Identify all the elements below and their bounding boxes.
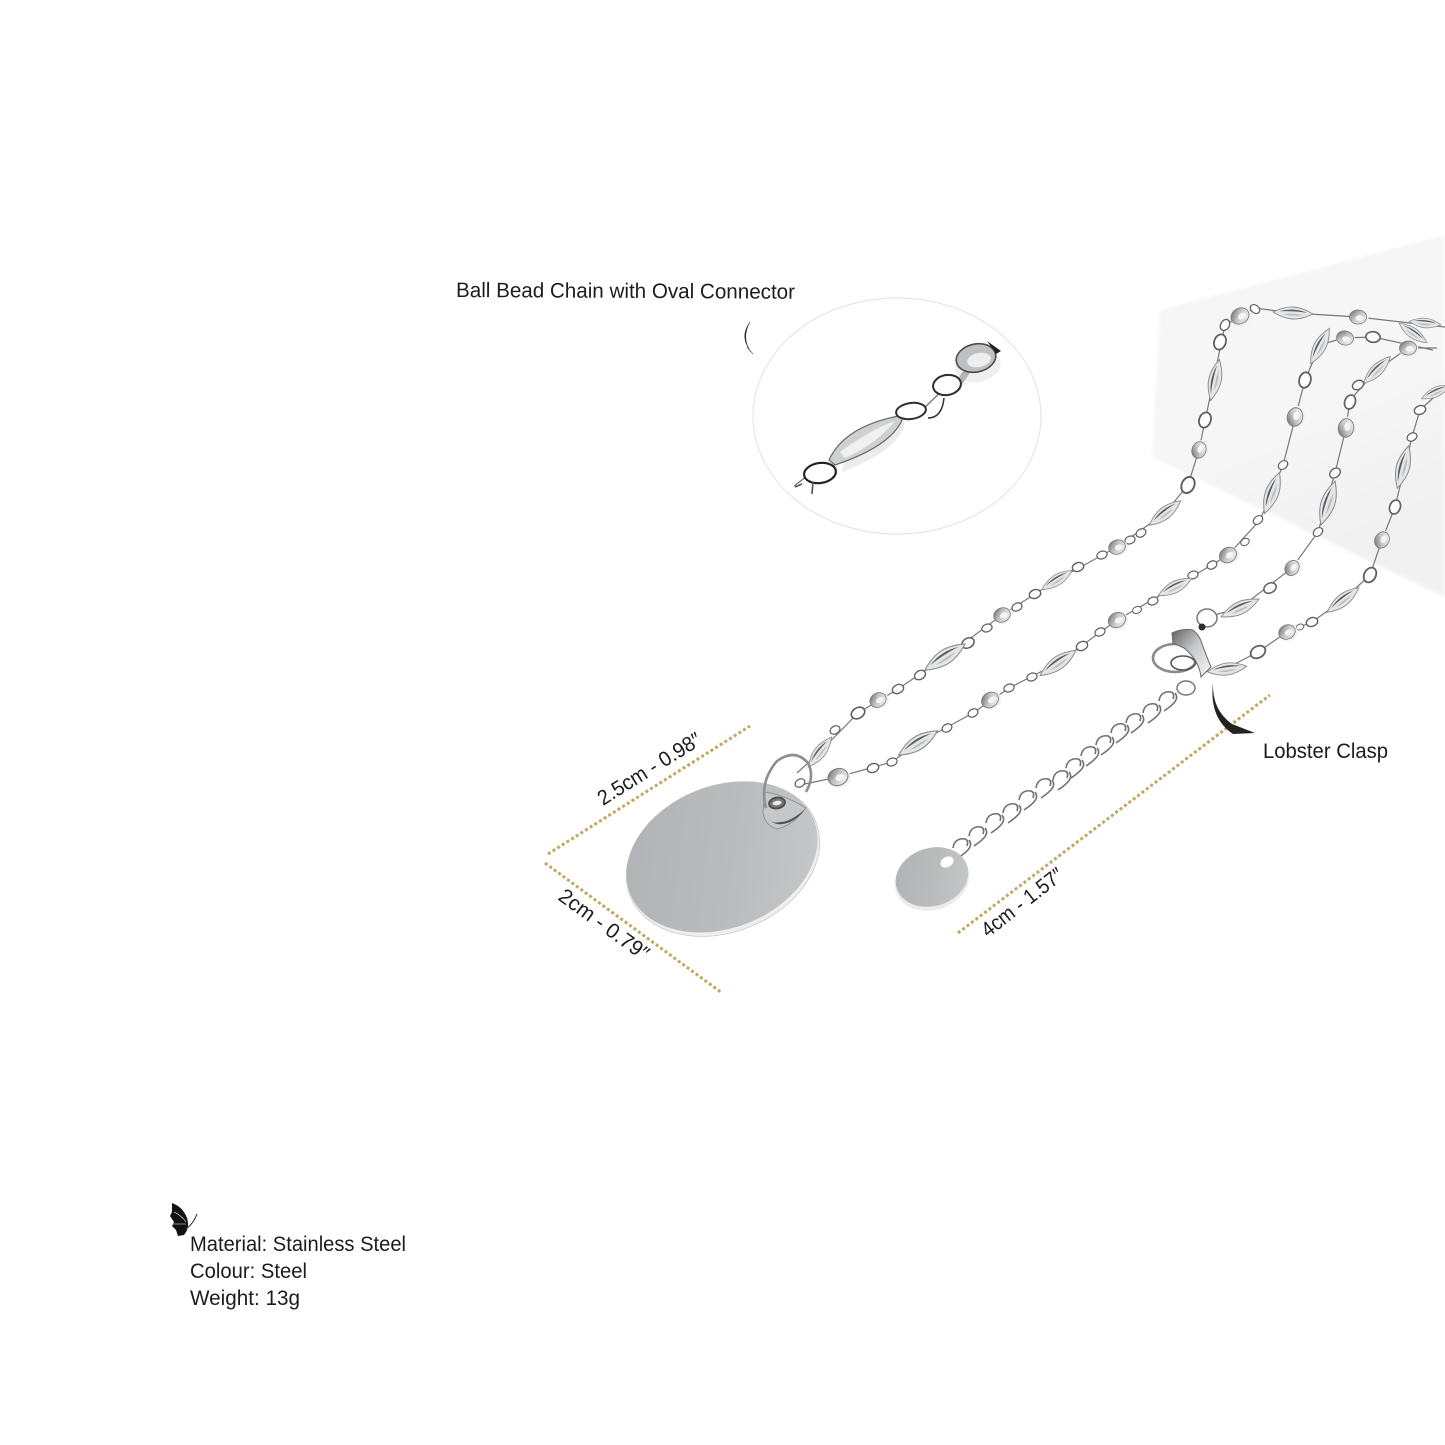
display block (1152, 235, 1445, 597)
text block: product specifications: Weight: 13g (190, 1287, 300, 1310)
dimension line: extender length (958, 695, 1270, 933)
text block: product specifications (190, 1233, 406, 1310)
text block: product specifications: Material: Stainless Steel (190, 1233, 406, 1256)
dimension label: 4cm: 4cm - 1.57″ (977, 863, 1069, 942)
magnified chain (794, 340, 1004, 494)
necklace strand B (794, 319, 1433, 791)
dimension label: 2cm: 2cm - 0.79″ (554, 884, 654, 966)
arrow: chain detail pointer (745, 322, 753, 354)
detail circle outline (753, 298, 1041, 534)
panel: chain detail circle (753, 298, 1041, 534)
dimension line: pendant height (545, 863, 722, 993)
text block: product specifications: Colour: Steel (190, 1260, 307, 1283)
necklace strand D (1206, 381, 1445, 678)
small extender tag (887, 838, 977, 920)
heading: chain detail label: Ball Bead Chain with Oval Connector (456, 279, 795, 304)
dimension line: pendant width (548, 726, 750, 854)
pendant hole (763, 792, 806, 829)
necklace strand A (797, 303, 1445, 773)
necklace strand C (1207, 340, 1437, 623)
icon: butterfly (170, 1203, 197, 1236)
dimension label: 2.5cm: 2.5cm - 0.98″ (593, 728, 706, 810)
large round pendant (603, 754, 843, 964)
extender chain (953, 692, 1177, 858)
jump ring (764, 755, 811, 808)
arrow: lobster clasp pointer (1212, 683, 1255, 734)
label: lobster clasp: Lobster Clasp (1263, 740, 1388, 763)
lobster clasp (1153, 609, 1217, 695)
